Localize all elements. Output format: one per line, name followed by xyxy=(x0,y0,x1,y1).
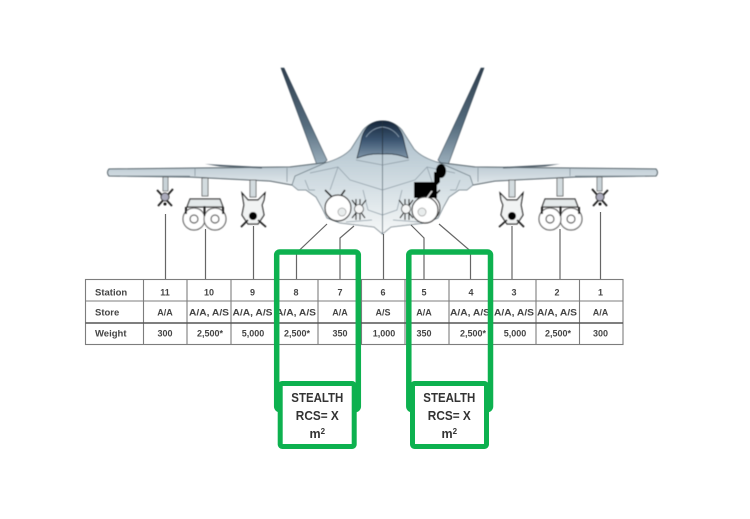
row: station: 1 xyxy=(598,287,603,297)
left wing xyxy=(108,162,345,185)
left tail fin xyxy=(281,68,327,165)
station 7 internal missile xyxy=(352,199,366,220)
callout: left stealth RCS: 2 xyxy=(321,427,326,436)
row: store: A/A xyxy=(332,307,348,317)
callout: left stealth RCS: RCS= X xyxy=(296,409,339,423)
callout: right stealth RCS: RCS= X xyxy=(428,409,471,423)
right half of aircraft (mirror) xyxy=(382,68,658,234)
station leader lines xyxy=(166,212,600,279)
row: store: A/A, A/S xyxy=(232,307,272,317)
row: station: 7 xyxy=(337,287,343,297)
row: store: A/A, A/S xyxy=(450,307,490,317)
row: station: 8 xyxy=(293,287,299,297)
left fuselage xyxy=(292,121,382,234)
green highlight: stations 8 and 7 xyxy=(277,252,358,410)
callout: right stealth RCS: 2 xyxy=(453,427,458,436)
row: weight: 350 xyxy=(416,328,432,338)
row: station: 11 xyxy=(160,287,170,297)
callout: right stealth RCS: m xyxy=(442,427,453,441)
row: weight: 1,000 xyxy=(373,328,395,338)
left fuselage panel lines xyxy=(305,160,382,222)
row: weight: 2,500* xyxy=(197,328,224,338)
row: station: 10 xyxy=(204,287,214,297)
row: station: Station xyxy=(95,287,127,298)
row: weight: 300 xyxy=(593,328,608,338)
callout: right stealth RCS xyxy=(412,384,486,446)
row: station: 9 xyxy=(250,287,255,297)
row: weight: Weight xyxy=(95,328,127,339)
row: store: A/A xyxy=(593,307,609,317)
row: weight: 2,500* xyxy=(460,328,487,338)
row: station: 5 xyxy=(421,287,427,297)
row: weight: 2,500* xyxy=(284,328,311,338)
row: store xyxy=(95,307,609,318)
callout: left stealth RCS: m xyxy=(310,427,321,441)
row: store: A/A, A/S xyxy=(537,307,577,317)
row: store: A/A, A/S xyxy=(189,307,229,317)
aircraft front view xyxy=(108,68,658,234)
left half of aircraft xyxy=(108,68,382,234)
row: station: 4 xyxy=(468,287,474,297)
left canopy frame arc xyxy=(366,127,382,137)
callout: left stealth RCS: STEALTH xyxy=(291,391,343,405)
callout: right stealth RCS: STEALTH xyxy=(423,391,475,405)
row: weight: 5,000 xyxy=(504,328,526,338)
row: station: 3 xyxy=(511,287,517,297)
station 8 internal bomb xyxy=(325,190,351,221)
row: weight: 350 xyxy=(332,328,348,338)
station table xyxy=(86,280,623,344)
row: store: A/A xyxy=(157,307,173,317)
row: weight: 2,500* xyxy=(545,328,572,338)
row: store: A/A xyxy=(416,307,432,317)
left wing strake xyxy=(205,164,262,168)
row: station: 6 xyxy=(380,287,386,297)
station 9 missile xyxy=(241,180,266,227)
row: weight: 300 xyxy=(157,328,173,338)
black redaction blocks xyxy=(412,164,446,223)
callout: left stealth RCS xyxy=(280,384,354,446)
row: station: 2 xyxy=(554,287,560,297)
row: station xyxy=(95,287,603,298)
table grid xyxy=(86,280,623,344)
row: store: A/A, A/S xyxy=(494,307,534,317)
row: weight xyxy=(95,328,608,339)
left canopy xyxy=(357,121,382,158)
row: store: A/S xyxy=(375,307,391,317)
row: store: A/A, A/S xyxy=(276,307,316,317)
station 10 twin bombs xyxy=(183,178,226,230)
row: weight: 5,000 xyxy=(242,328,264,338)
left wing panel lines xyxy=(120,168,287,182)
station 11 missile xyxy=(157,177,173,206)
row: store: Store xyxy=(95,307,119,318)
green highlight: stations 5 and 4 xyxy=(409,252,490,410)
